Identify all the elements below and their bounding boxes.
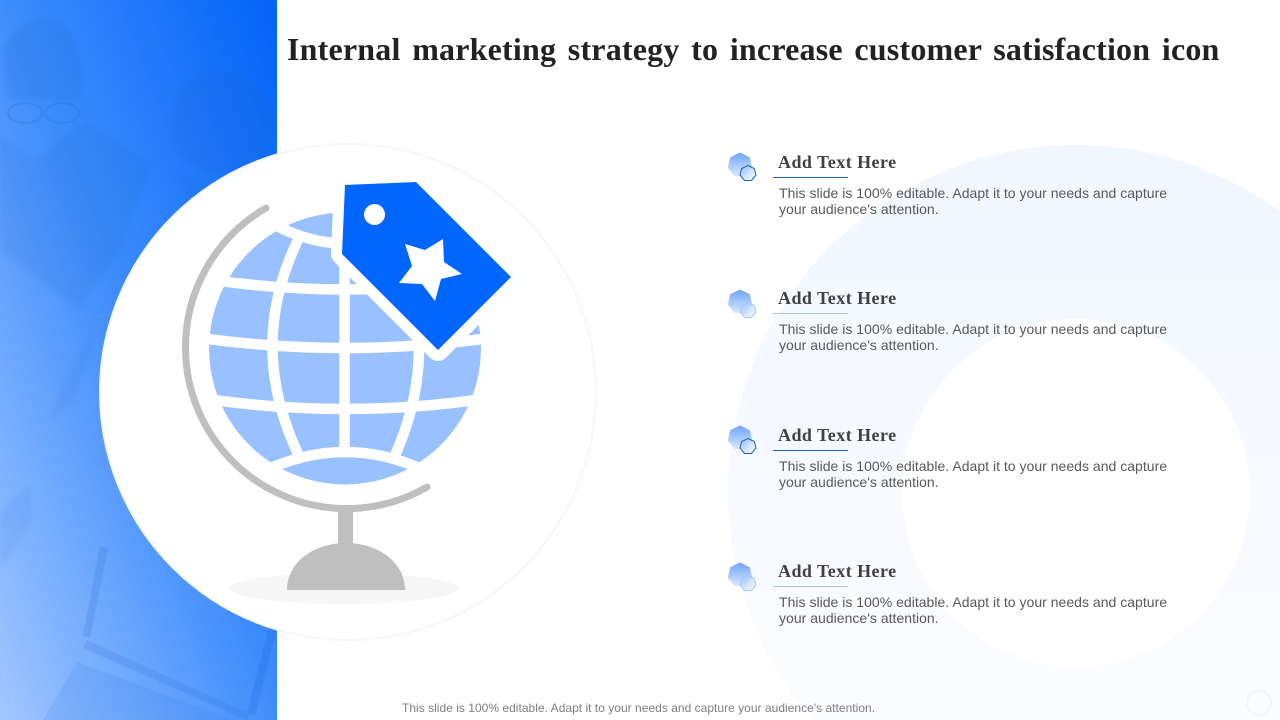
star on tag <box>399 239 462 301</box>
heading 1: Add Text Here <box>778 152 897 172</box>
underline 3 <box>773 450 848 451</box>
globe sphere with grid <box>209 213 481 484</box>
body 3: This slide is 100% editable. Adapt it to your needs and capture <box>779 458 1167 474</box>
body 3 <box>779 458 1167 490</box>
text block 1 <box>773 152 1167 217</box>
heading 2: Add Text Here <box>778 288 897 308</box>
icon: globe on stand with price tag <box>185 182 511 604</box>
body 4: your audience's attention. <box>779 610 939 626</box>
body 1: This slide is 100% editable. Adapt it to your needs and capture <box>779 185 1167 201</box>
body 4 <box>779 594 1167 626</box>
underline 4 <box>773 586 848 587</box>
underline 1 <box>773 177 848 178</box>
body 2: your audience's attention. <box>779 337 939 353</box>
body 1 <box>779 185 1167 217</box>
underline 2 <box>773 313 848 314</box>
text block 2 <box>773 288 1167 353</box>
panel: left photo with blue gradient <box>0 0 277 720</box>
heading 3: Add Text Here <box>778 425 897 445</box>
bullet icon 1 <box>728 152 756 180</box>
body 2 <box>779 321 1167 353</box>
body 4: This slide is 100% editable. Adapt it to your needs and capture <box>779 594 1167 610</box>
white circle backdrop <box>100 144 596 640</box>
bullet icon 4 <box>728 562 756 590</box>
photo: faint people <box>2 42 34 558</box>
globe stand <box>185 208 427 590</box>
background ring <box>728 145 1280 720</box>
body 3: your audience's attention. <box>779 474 939 490</box>
small corner circle <box>1247 691 1271 715</box>
price tag <box>342 182 511 350</box>
photo: laptop <box>43 546 277 720</box>
bullet icon 3 <box>728 426 756 454</box>
bullet icon 2 <box>728 290 756 318</box>
shadow under stand <box>228 573 458 604</box>
photo: glasses <box>8 103 79 123</box>
title: Internal marketing strategy to increase customer satisfaction icon <box>287 31 1220 67</box>
heading 4: Add Text Here <box>778 561 897 581</box>
body 1: your audience's attention. <box>779 201 939 217</box>
body 2: This slide is 100% editable. Adapt it to your needs and capture <box>779 321 1167 337</box>
text block 4 <box>773 561 1167 626</box>
text block 3 <box>773 425 1167 490</box>
footer note: This slide is 100% editable. Adapt it to your needs and capture your audience's attention. <box>402 701 875 715</box>
